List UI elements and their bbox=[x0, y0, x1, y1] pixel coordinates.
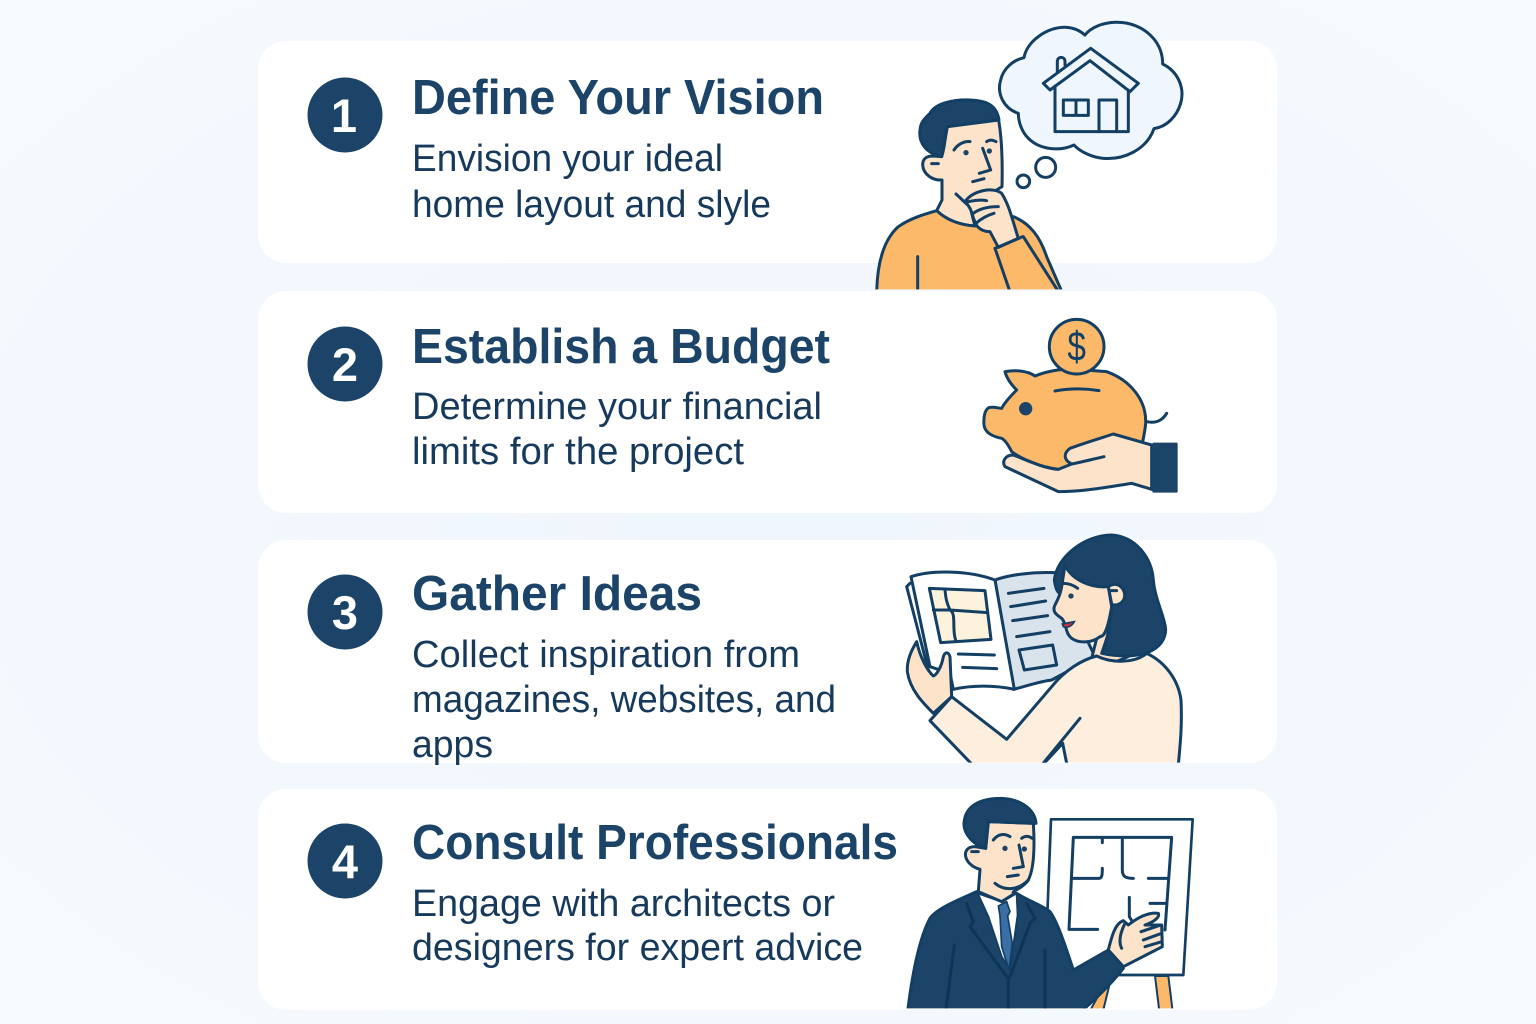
step number 1 badge bbox=[308, 78, 382, 152]
panel: step 1 define your vision bbox=[258, 22, 1277, 297]
description: step 4: designers for expert advice bbox=[412, 927, 863, 969]
heading: consult professionals: Consult Professionals bbox=[412, 816, 898, 870]
description: step 1: Envision your ideal bbox=[412, 138, 723, 180]
icon: dollar coin bbox=[1049, 319, 1104, 374]
icon: dollar coin: $ bbox=[1067, 323, 1086, 370]
description: step 2: limits for the project bbox=[412, 431, 744, 473]
heading: define your vision: Define Your Vision bbox=[412, 71, 824, 125]
heading: gather ideas: Gather Ideas bbox=[412, 567, 702, 621]
step number 1 badge: 1 bbox=[331, 89, 357, 142]
pig details bbox=[1019, 389, 1167, 422]
icon: piggy bank bbox=[984, 369, 1146, 469]
card 1 background bbox=[258, 41, 1277, 263]
panel: step 4 consult professionals bbox=[258, 789, 1277, 1017]
description: step 4: Engage with architects or bbox=[412, 883, 835, 925]
icon: easel with floor plan bbox=[1045, 819, 1193, 1017]
description: step 3: apps bbox=[412, 724, 493, 766]
panel: step 2 establish a budget bbox=[258, 291, 1277, 513]
description: step 3: Collect inspiration from bbox=[412, 634, 800, 676]
icon: open hand with cuff bbox=[1004, 434, 1178, 493]
illustration: architect presenting a floor plan bbox=[907, 798, 1193, 1017]
illustration: man thinking of a house bbox=[877, 22, 1182, 297]
panel: step 3 gather ideas bbox=[258, 535, 1277, 772]
woman figure bbox=[907, 535, 1181, 772]
card 4 background bbox=[258, 789, 1277, 1010]
description: step 2: Determine your financial bbox=[412, 386, 822, 428]
card 2 background bbox=[258, 291, 1277, 513]
step number 4 badge bbox=[308, 824, 382, 898]
illustration: woman reading a magazine bbox=[907, 535, 1181, 772]
step number 3 badge bbox=[308, 574, 382, 650]
icon: open magazine bbox=[907, 572, 1095, 689]
step number 2 badge bbox=[308, 326, 382, 402]
step number 3 badge: 3 bbox=[332, 586, 358, 639]
man figure bbox=[877, 100, 1064, 297]
step number 2 badge: 2 bbox=[332, 338, 358, 391]
illustration: piggy bank held in a hand bbox=[984, 319, 1178, 493]
step number 4 badge: 4 bbox=[332, 835, 358, 888]
heading: establish a budget: Establish a Budget bbox=[412, 320, 830, 374]
card 3 background bbox=[258, 540, 1277, 763]
description: step 3: magazines, websites, and bbox=[412, 679, 836, 721]
icon: thought cloud with house bbox=[1000, 22, 1182, 188]
man in suit figure bbox=[907, 798, 1162, 1017]
description: step 1: home layout and slyle bbox=[412, 184, 771, 226]
